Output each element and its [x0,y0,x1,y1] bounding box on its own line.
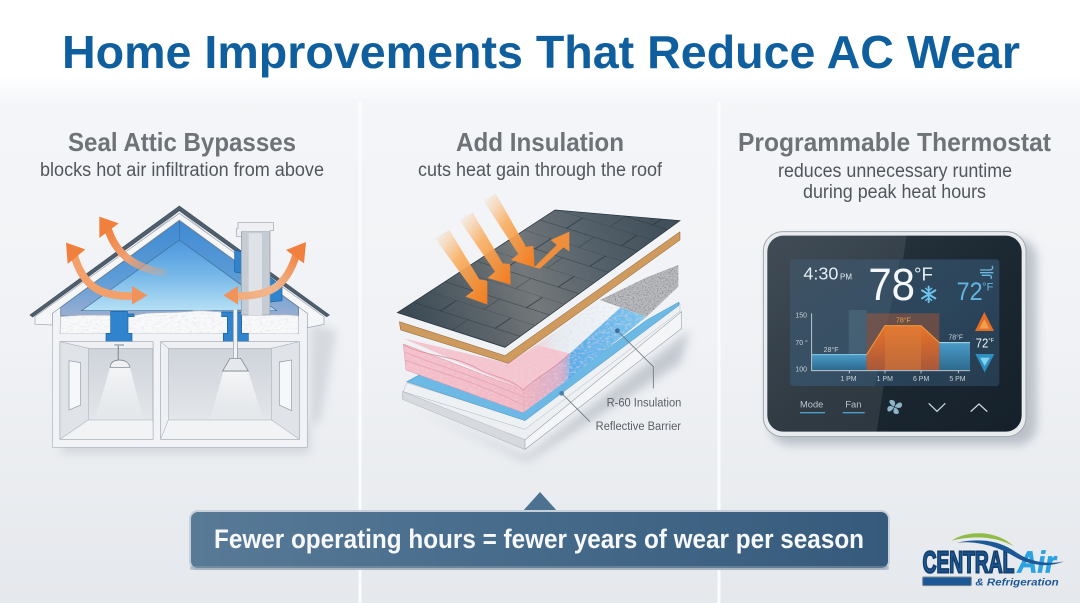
lights [95,367,143,420]
text: seal attic description: blocks hot air infiltration from above [40,160,324,181]
rooms [60,342,153,439]
icon: house cutaway [30,206,337,453]
attic floor insulation [60,311,299,334]
screen [790,259,999,386]
schedule chart: 6 PM [913,376,929,383]
text: thermostat description [778,161,1012,203]
icon: wind [980,266,993,279]
chimney [235,250,243,273]
logo: central air and refrigeration: CENTRAL [923,545,1014,579]
icon: roof layer cross-section [397,194,690,462]
insulation batt [403,265,678,413]
icon: thermostat: °F [914,264,933,285]
schedule chart: 70 ° [795,339,808,347]
roof cap [30,206,329,317]
heading: seal attic bypasses: Seal Attic Bypasses [68,127,296,157]
schedule chart: 78°F [896,317,911,325]
sun arrows [435,230,487,305]
house shell [52,211,307,447]
schedule chart: 78°F [948,334,963,342]
schedule chart: 1 PM [877,376,893,383]
schedule chart [795,310,970,383]
bottom buttons: Fan [845,400,861,410]
schedule chart: 150 [795,313,807,320]
heading: programmable thermostat: Programmable Thermostat [738,127,1051,157]
current temperature: 78 [868,259,915,310]
callout leaders [562,331,653,422]
logo: central air and refrigeration: Air [1016,545,1058,579]
setpoint controls: °F [988,338,995,344]
logo: central air and refrigeration [923,533,1064,589]
attic space [61,221,299,316]
schedule chart: 100 [795,367,807,374]
bottom buttons: Mode [800,400,823,410]
wood sheathing [399,232,680,363]
schedule chart: 5 PM [949,376,966,383]
heading: add insulation: Add Insulation [456,127,624,157]
panel: add insulation [397,127,690,462]
bypass gaps [106,311,134,342]
panel: seal attic bypasses [30,127,337,453]
reflective barrier [403,303,680,429]
schedule chart: 1 PM [840,376,857,383]
set temperature: 72 [957,278,983,306]
setpoint controls: 72 [976,336,988,350]
shingles [397,210,680,347]
callout banner: Fewer operating hours = fewer years of wear per season [214,524,864,554]
icon: thermostat [763,232,1037,445]
logo: central air and refrigeration: & Refrigeration [975,578,1059,589]
label: reflective barrier: Reflective Barrier [596,419,681,433]
schedule chart: 28°F [824,346,839,354]
bottom buttons [800,400,987,414]
text: insulation description: cuts heat gain through the roof [418,160,663,181]
setpoint controls [975,312,995,372]
air leakage arrows [74,227,297,296]
base board [403,312,682,449]
time: 4:30PM [803,263,852,283]
icon: fan [887,400,902,414]
label: r-60 insulation: R-60 Insulation [607,395,681,409]
icon: thermostat: °F [982,282,994,294]
title: Home Improvements That Reduce AC Wear [62,26,1020,78]
callout banner [190,492,889,570]
icon: snowflake [922,287,935,302]
text: thermostat description: reduces unnecessary runtime [778,161,1012,182]
panel: programmable thermostat [738,127,1051,445]
text: thermostat description: during peak heat hours [803,182,986,203]
